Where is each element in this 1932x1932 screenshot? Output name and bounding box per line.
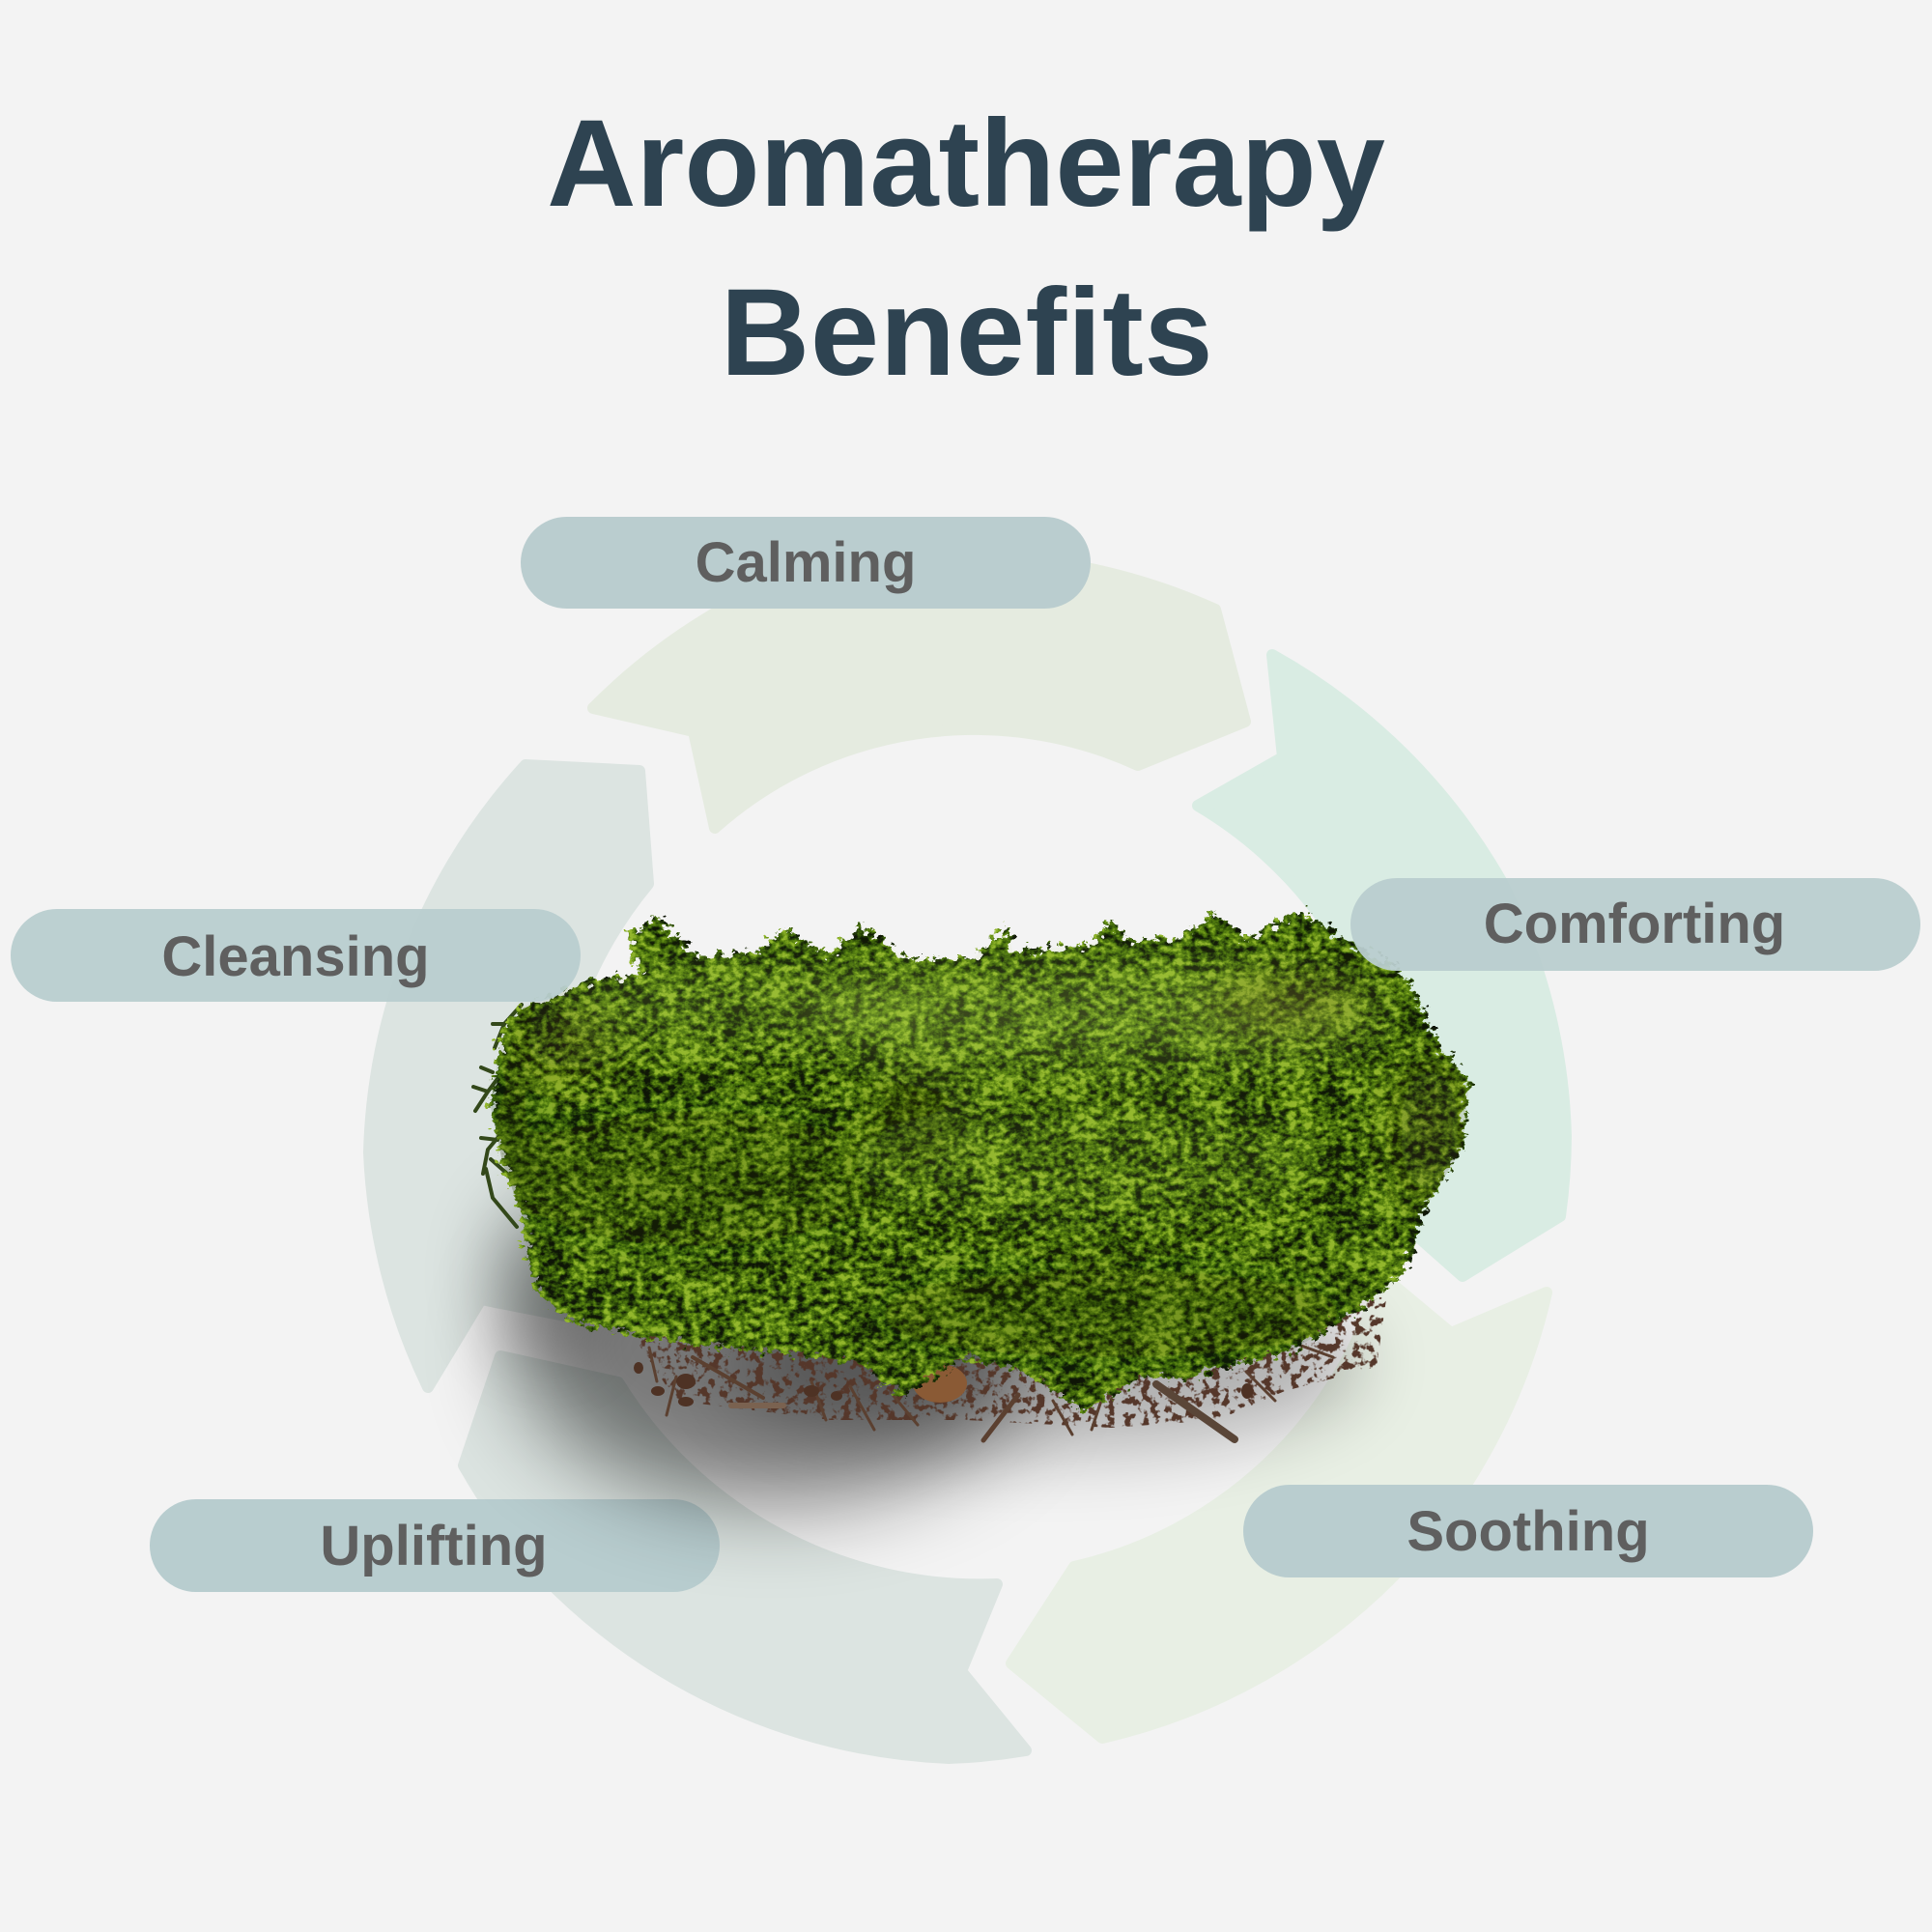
pill: Uplifting: Uplifting	[320, 1515, 548, 1577]
pill: Comforting	[1350, 878, 1920, 971]
pill: Uplifting	[150, 1499, 720, 1592]
arrow: soothing segment	[1011, 1275, 1547, 1738]
moss image	[473, 910, 1469, 1440]
pill: Calming: Calming	[696, 531, 916, 594]
moss left fronds	[473, 1005, 522, 1227]
moss tone patches	[493, 966, 1459, 1357]
title: Benefits	[721, 264, 1213, 402]
moss debris and twigs	[628, 1265, 1391, 1440]
pill: Cleansing: Cleansing	[161, 925, 430, 988]
arrow: comforting segment	[1198, 655, 1566, 1276]
pill: Comforting: Comforting	[1484, 893, 1785, 955]
pill: Cleansing	[11, 909, 581, 1002]
pill: Soothing: Soothing	[1406, 1500, 1650, 1563]
title: Aromatherapy	[547, 95, 1385, 233]
pill: Calming	[521, 517, 1091, 609]
arrow: cleansing segment	[369, 765, 648, 1387]
arrow: uplifting segment	[464, 1356, 1026, 1758]
arrow: calming segment	[593, 556, 1245, 828]
moss drop shadow	[497, 1193, 1362, 1502]
pill: Soothing	[1243, 1485, 1813, 1577]
title	[547, 95, 1385, 402]
moss body	[491, 910, 1469, 1412]
